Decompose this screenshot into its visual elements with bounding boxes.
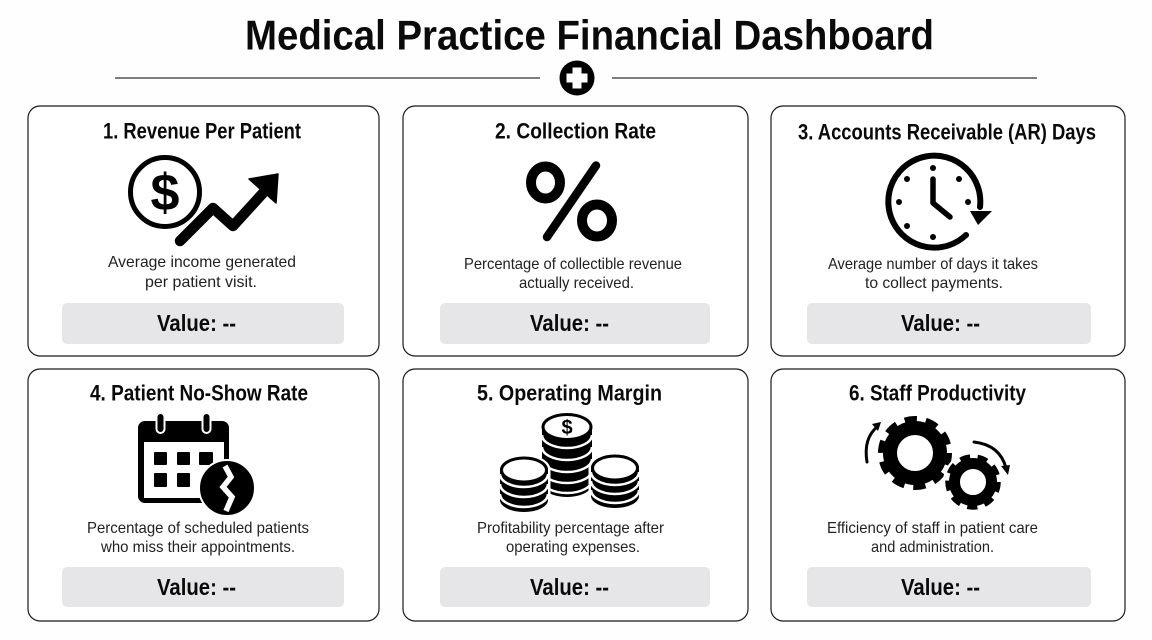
description: Percentage of collectible revenue xyxy=(464,256,682,273)
left coin stack xyxy=(500,457,548,512)
description xyxy=(477,520,665,556)
icon: calendar with broken circle xyxy=(138,413,255,516)
value box: Value: -- xyxy=(530,574,609,600)
heading: 5. Operating Margin xyxy=(477,380,662,406)
icon: dollar coin with rising arrow xyxy=(130,158,278,241)
panel: operating margin xyxy=(403,369,748,621)
icon: gears with rotation arrows xyxy=(866,420,1010,512)
panel: accounts receivable days xyxy=(771,106,1125,356)
description: who miss their appointments. xyxy=(100,539,295,556)
description: Average number of days it takes xyxy=(828,256,1038,273)
value box: Value: -- xyxy=(157,310,236,336)
description: to collect payments. xyxy=(865,275,1003,292)
heading: 2. Collection Rate xyxy=(495,118,656,144)
value box xyxy=(440,567,710,607)
center coin stack: $ xyxy=(561,417,573,439)
icon: clock with arrow xyxy=(888,156,992,248)
description: per patient visit. xyxy=(145,274,257,291)
description: and administration. xyxy=(871,539,994,556)
description: Average income generated xyxy=(108,254,296,271)
description xyxy=(108,254,296,291)
value box: Value: -- xyxy=(157,574,236,600)
value box xyxy=(62,567,344,607)
description: Percentage of scheduled patients xyxy=(87,520,309,537)
value box xyxy=(807,567,1091,607)
description: actually received. xyxy=(519,275,634,292)
description xyxy=(464,256,682,292)
value box xyxy=(440,303,710,344)
value box: Value: -- xyxy=(901,574,980,600)
heading: 6. Staff Productivity xyxy=(849,380,1027,406)
description: Efficiency of staff in patient care xyxy=(827,520,1038,537)
description xyxy=(87,520,309,556)
description: Profitability percentage after xyxy=(477,520,665,537)
description xyxy=(828,256,1038,292)
description: operating expenses. xyxy=(506,539,640,556)
value box xyxy=(62,303,344,344)
value box: Value: -- xyxy=(901,310,980,336)
panel: staff productivity xyxy=(771,369,1125,621)
value box: Value: -- xyxy=(530,310,609,336)
description xyxy=(827,520,1038,556)
panel: patient no-show rate xyxy=(28,369,379,621)
value box xyxy=(807,303,1091,344)
right coin stack xyxy=(591,455,639,508)
heading: 4. Patient No-Show Rate xyxy=(90,380,308,406)
title: Medical Practice Financial Dashboard xyxy=(245,12,934,58)
panel: revenue per patient xyxy=(28,106,379,356)
heading: 1. Revenue Per Patient xyxy=(103,118,302,144)
heading: 3. Accounts Receivable (AR) Days xyxy=(798,120,1096,144)
icon: dollar coin with rising arrow: $ xyxy=(151,164,180,222)
icon: percent sign xyxy=(531,166,612,237)
title divider with medical cross xyxy=(115,60,1037,96)
panel: collection rate xyxy=(403,106,748,356)
icon: coin stacks xyxy=(500,414,639,512)
